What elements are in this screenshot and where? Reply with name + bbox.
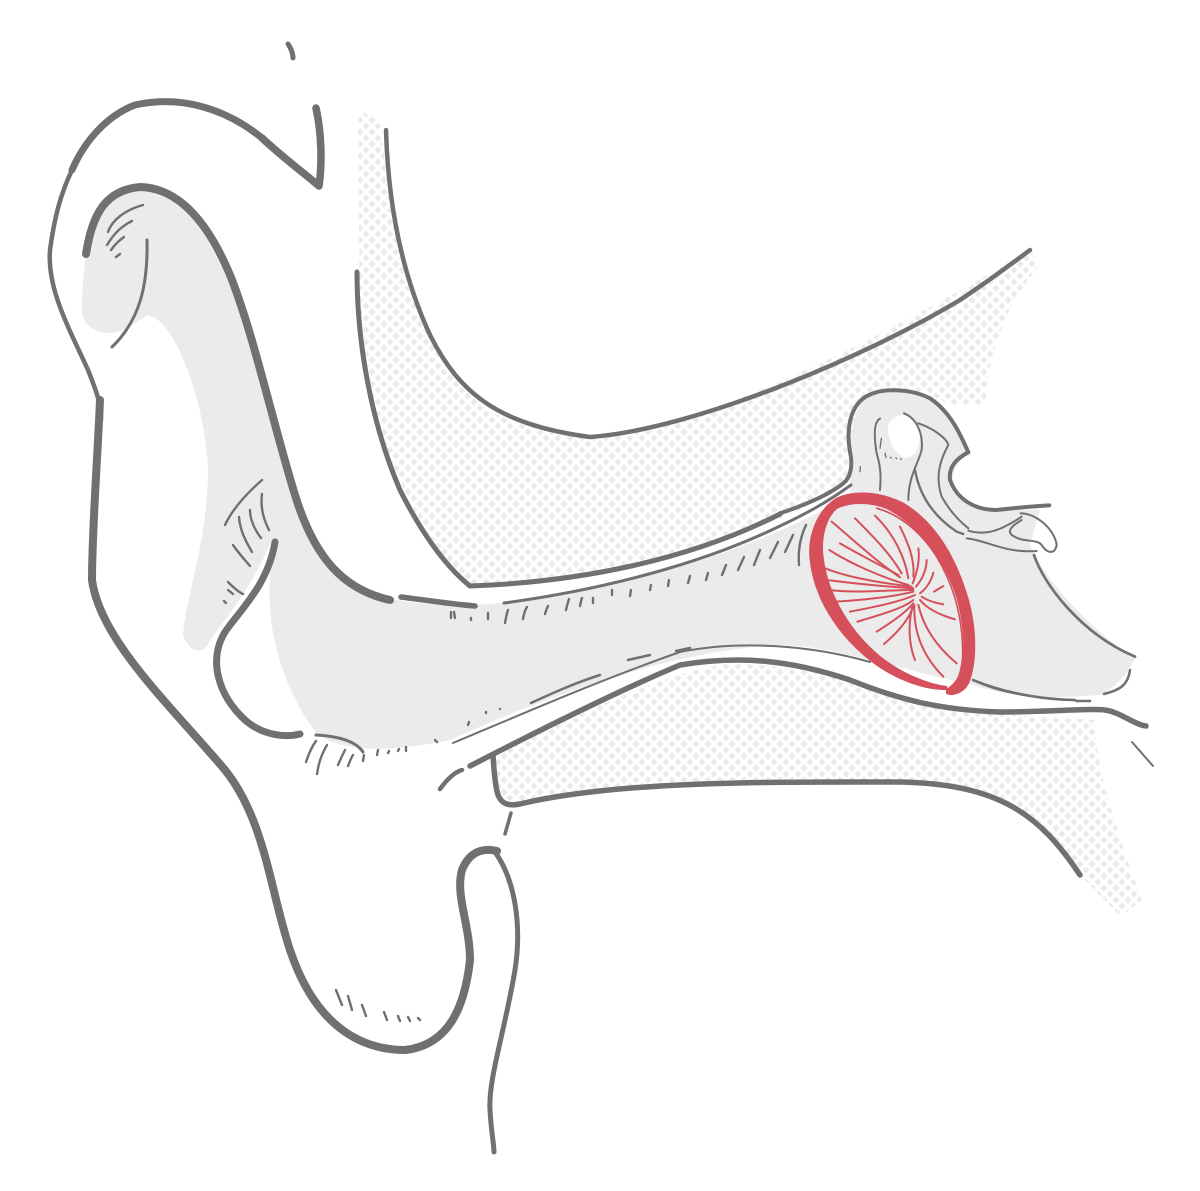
- stapes top: [968, 517, 1022, 533]
- floor blob: [440, 770, 462, 789]
- hatch marks: [107, 205, 806, 1021]
- canal floor dash 1: [628, 655, 650, 660]
- eardrum spokes: [825, 516, 957, 677]
- dotted bone: upper: [358, 110, 1040, 588]
- eardrum: [810, 493, 975, 694]
- pinna top tip mark: [288, 44, 293, 58]
- ossicle outer outline: [780, 390, 1049, 513]
- eardrum ring: [810, 493, 975, 694]
- ear canal grey fill: [82, 190, 1135, 749]
- malleus right: [904, 413, 922, 500]
- antihelix to lobe outer edge: [92, 400, 497, 1050]
- helix top edge: [72, 102, 262, 170]
- lower bone outline: [493, 756, 1080, 875]
- tissue dash right: [1076, 700, 1090, 702]
- canal top dash: [401, 597, 475, 606]
- canal floor short line: [531, 675, 600, 703]
- pinna notch: [262, 108, 321, 186]
- tissue lower: [973, 680, 1073, 700]
- stapes bottom: [967, 538, 1037, 551]
- connector dash: [505, 813, 511, 834]
- dotted bone: lower: [495, 664, 1142, 916]
- canal floor thin line: [453, 645, 870, 743]
- tissue edge to right: [1034, 555, 1135, 657]
- far right tick: [1132, 742, 1153, 766]
- malleus: [875, 419, 881, 490]
- white malleus highlight: [888, 415, 920, 458]
- helix inner edge: [86, 187, 390, 600]
- incus long process: [915, 470, 963, 534]
- tragus edge: [316, 735, 363, 752]
- canal floor main: [470, 660, 1146, 766]
- upper bone lower edge: [357, 272, 780, 586]
- helix outer edge: [50, 170, 101, 420]
- eardrum inner arc: [877, 508, 963, 687]
- canal roof line: [504, 485, 851, 603]
- incus: [918, 423, 968, 528]
- detail marks: [860, 438, 901, 472]
- tube edge right: [1104, 670, 1130, 694]
- canal floor dash 2: [676, 648, 690, 651]
- inner fold: [112, 240, 147, 347]
- concha edge: [217, 542, 300, 736]
- upper bone line: [386, 130, 1030, 437]
- stapes footplate: [1010, 513, 1057, 552]
- ossicles, middle ear and eardrum detail: [780, 390, 1135, 700]
- lobe back line: [490, 852, 518, 1152]
- tissue line right: [973, 680, 1075, 700]
